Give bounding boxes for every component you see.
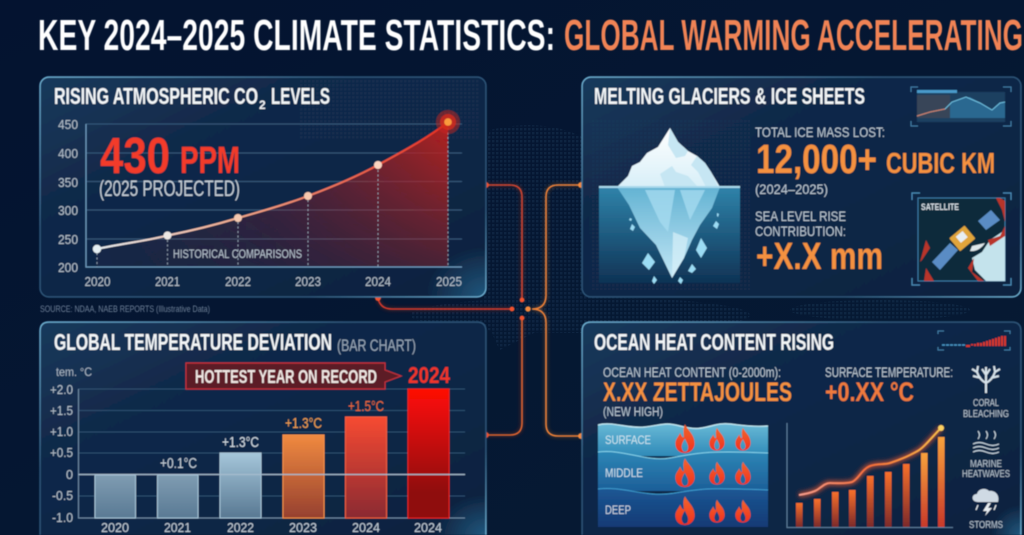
line chart: CO2: 250 — [58, 232, 78, 247]
heading: CO2: LEVELS — [271, 83, 330, 109]
satellite image: SATELLITE — [921, 202, 959, 212]
line chart: CO2 — [58, 110, 462, 289]
source note: SOURCE: NDAA, NAEB REPORTS (Illustrative Data) — [40, 304, 210, 315]
text block: heat content: OCEAN HEAT CONTENT (0-2000m): — [603, 364, 781, 380]
callout: 430 ppm: PPM — [180, 140, 240, 182]
text block: sea level — [755, 208, 883, 278]
text block: ice mass: 12,000+ — [756, 136, 877, 182]
bar chart: temperature — [50, 365, 465, 535]
bar chart: temperature: +0.5 — [50, 445, 73, 460]
mini chart: ocean trend — [938, 331, 1010, 350]
bar chart: temperature: 2024 — [414, 520, 442, 535]
heading: CO2: RISING ATMOSPHERIC CO — [54, 83, 258, 109]
bar chart: temperature: tem. °C — [56, 365, 92, 379]
bar chart: temperature: -1.0 — [52, 510, 73, 525]
icon: coral bleaching: BLEACHING — [963, 408, 1009, 420]
line chart: CO2: 2025 — [436, 274, 462, 289]
text block: sea level: SEA LEVEL RISE — [755, 208, 846, 224]
line chart: CO2: 2021 — [155, 274, 180, 289]
heading: CO2: 2 — [259, 98, 266, 112]
callout: hottest year: 2024 — [408, 362, 450, 388]
bar chart: temperature: 2024 — [352, 520, 380, 535]
line chart: CO2: 2022 — [225, 274, 251, 289]
text block: heat content: (NEW HIGH) — [603, 404, 663, 419]
icon: iceberg — [599, 128, 740, 284]
ocean layers: SURFACE — [605, 433, 651, 447]
bar chart: temperature: +1.0 — [50, 424, 73, 439]
line chart: CO2: 400 — [58, 146, 78, 161]
ocean layers: MIDDLE — [605, 466, 643, 480]
bar chart: temperature: +1.5°C — [348, 399, 384, 415]
icon: coral bleaching — [963, 366, 1009, 420]
main title: KEY 2024–2025 CLIMATE STATISTICS: — [38, 11, 555, 60]
bar chart: temperature: +1.3°C — [285, 416, 322, 432]
line chart: CO2: 200 — [58, 260, 78, 275]
bar chart: temperature: +0.1°C — [160, 456, 197, 472]
ocean layers — [598, 424, 768, 527]
bar chart: temperature: 2023 — [289, 520, 317, 535]
line chart: CO2: 2020 — [84, 274, 110, 289]
heading: temperature: (BAR CHART) — [337, 336, 416, 355]
icon: storms — [969, 489, 1003, 531]
bar chart: temperature: +2.0 — [50, 382, 73, 397]
bar chart: temperature: -0.5 — [52, 488, 73, 503]
panel: temperature deviation — [40, 322, 486, 535]
heading: glaciers: MELTING GLACIERS & ICE SHEETS — [594, 83, 865, 109]
line chart: CO2: 450 — [58, 117, 78, 132]
line chart: CO2: 350 — [58, 175, 78, 190]
text block: heat content — [603, 364, 792, 419]
chart: ocean heat trend — [787, 423, 953, 528]
icon: storms: STORMS — [969, 519, 1003, 531]
text block: surface temperature: +0.XX °C — [825, 377, 914, 407]
bar chart: temperature: +1.3°C — [222, 435, 259, 451]
bar chart: temperature: 2022 — [227, 520, 254, 535]
line chart: CO2: 2023 — [295, 274, 321, 289]
icon: coral bleaching: CORAL — [973, 397, 999, 409]
callout: 430 ppm: 430 — [100, 127, 170, 184]
text block: ice mass: (2024–2025) — [755, 181, 828, 197]
ocean layers: DEEP — [605, 503, 631, 517]
callout: 430 ppm — [99, 127, 240, 201]
satellite image — [912, 193, 1011, 285]
text block: ice mass: TOTAL ICE MASS LOST: — [755, 124, 885, 140]
line chart: CO2: HISTORICAL COMPARISONS — [173, 247, 302, 261]
panel: melting glaciers — [582, 77, 1021, 297]
text block: surface temperature: SURFACE TEMPERATURE: — [825, 364, 953, 380]
text block: ice mass — [755, 124, 995, 197]
text block: sea level: CONTRIBUTION: — [755, 223, 846, 239]
connector lines — [375, 182, 584, 439]
bar chart: temperature: 2020 — [101, 520, 129, 535]
text block: sea level: +X.X mm — [756, 236, 883, 278]
callout: hottest year: HOTTEST YEAR ON RECORD — [195, 367, 377, 387]
icon: marine heatwaves — [962, 431, 1010, 480]
heading: ocean: OCEAN HEAT CONTENT RISING — [594, 329, 834, 355]
panel: ocean heat — [582, 322, 1021, 535]
line chart: CO2: 300 — [58, 203, 78, 218]
bar chart: temperature: +1.5 — [50, 403, 73, 418]
panel: CO2 levels — [40, 77, 486, 297]
callout: 430 ppm: (2025 PROJECTED) — [99, 176, 240, 201]
icon: marine heatwaves: MARINE — [970, 458, 1002, 470]
line chart: CO2: 2024 — [365, 274, 391, 289]
text block: surface temperature — [825, 364, 953, 407]
bar chart: temperature: 0 — [66, 467, 73, 482]
bar chart: temperature: 2021 — [164, 520, 191, 535]
mini chart: ice trend — [911, 87, 1011, 126]
text block: heat content: X.XX ZETTAJOULES — [603, 377, 792, 407]
heading: temperature: GLOBAL TEMPERATURE DEVIATION — [54, 329, 332, 355]
